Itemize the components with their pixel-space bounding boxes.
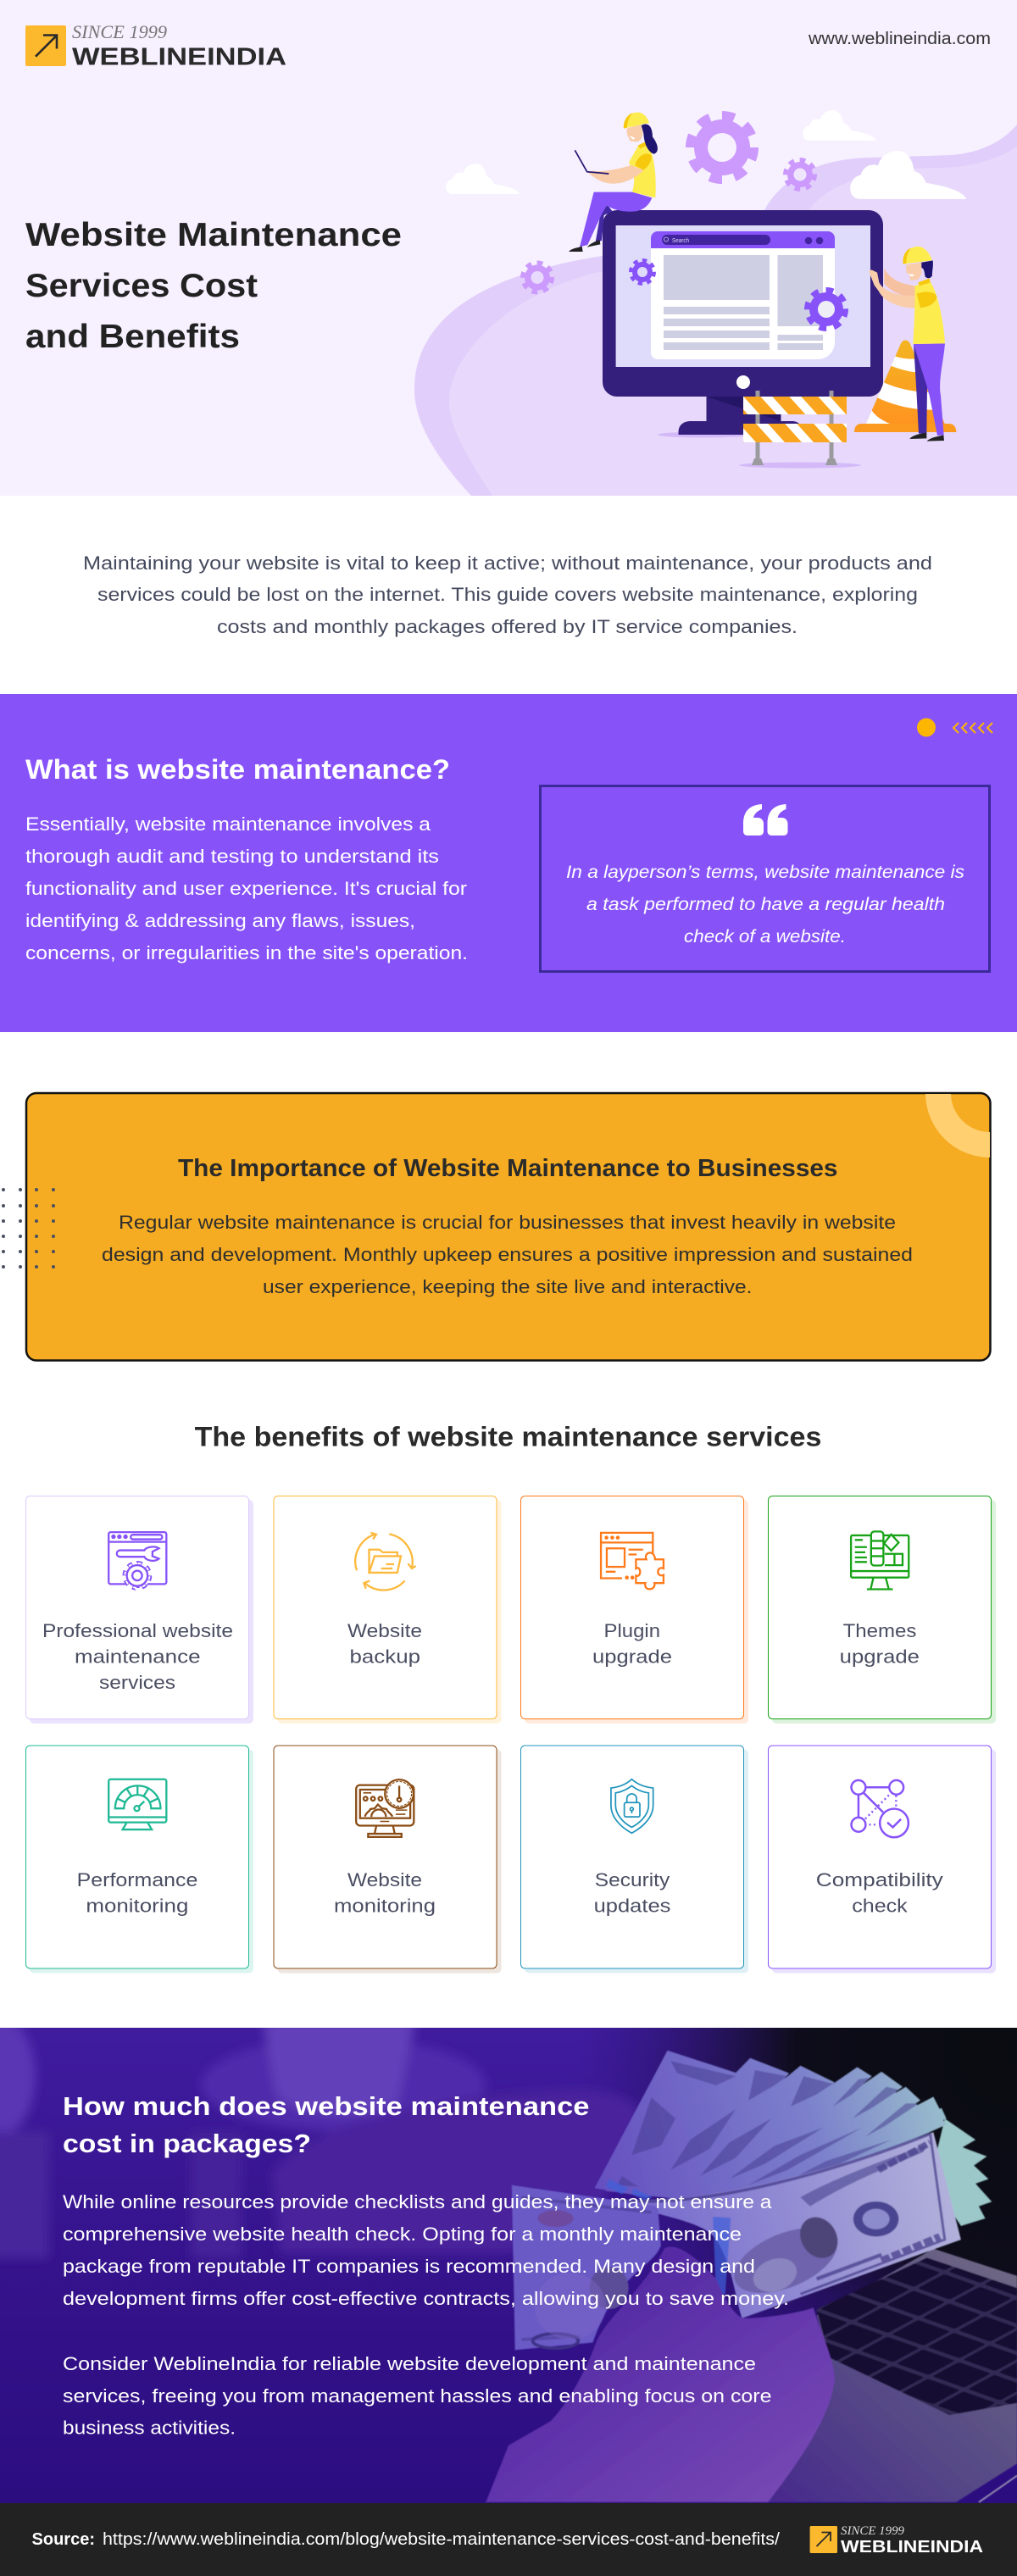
body text: concerns, or irregularities in the site's operation. (25, 942, 468, 963)
title: Services Cost (25, 268, 258, 304)
body text: second paragraph (63, 2353, 771, 2439)
title: Website Maintenance (25, 217, 402, 253)
panel: cost in packages (0, 2017, 1017, 2503)
label (347, 1620, 422, 1668)
icon: clouds (446, 110, 966, 199)
heading: How much does website maintenance (63, 2091, 590, 2121)
label (77, 1869, 197, 1917)
heading: What is website maintenance? (25, 754, 450, 785)
label (592, 1620, 672, 1668)
body text: Regular website maintenance is crucial for businesses that invest heavily in website (119, 1212, 896, 1233)
label (594, 1869, 670, 1917)
title: and Benefits (25, 319, 240, 355)
body text: functionality and user experience. It's crucial for (25, 878, 467, 899)
website url: www.weblineindia.com (808, 30, 991, 48)
label: upgrade (840, 1646, 920, 1668)
label: monitoring (86, 1895, 188, 1917)
icon: small gear left (523, 263, 552, 291)
decoration: dot and chevrons (917, 719, 992, 737)
label: monitoring (334, 1895, 436, 1917)
logo: WEBLINEINDIA (72, 44, 286, 71)
label (816, 1869, 943, 1917)
body text: second paragraph: services, freeing you from management hassles and enabling focus on core (63, 2385, 771, 2407)
quote text: In a layperson’s terms, website maintenance is (566, 863, 965, 882)
body text: first paragraph (63, 2191, 789, 2309)
panel: importance of website maintenance (2, 1091, 992, 1362)
body text (102, 1212, 913, 1297)
label (334, 1869, 436, 1917)
body text: Essentially, website maintenance involves a (25, 813, 431, 835)
label: Website (347, 1620, 422, 1641)
heading (63, 2091, 590, 2158)
icon: monitor with colour swatches (851, 1531, 909, 1589)
label (42, 1620, 233, 1693)
footer logo (810, 2524, 983, 2557)
body text: first paragraph: development firms offer cost-effective contracts, allowing you to save money. (63, 2288, 789, 2309)
footer logo: WEBLINEINDIA (841, 2538, 983, 2557)
card: website backup (274, 1496, 502, 1724)
intro paragraph: services could be lost on the internet. This guide covers website maintenance, exploring (97, 584, 918, 605)
icon: wrench and gear window (108, 1532, 166, 1589)
label: services (99, 1672, 175, 1693)
footer (0, 2503, 1017, 2576)
source text: https://www.weblineindia.com/blog/website-maintenance-services-cost-and-benefits/ (103, 2530, 780, 2549)
label: check (852, 1895, 909, 1917)
hero background waves (414, 125, 1017, 496)
card: security updates (520, 1746, 748, 1973)
label: Performance (77, 1869, 197, 1890)
card: themes upgrade (768, 1496, 996, 1724)
intro paragraph (83, 552, 932, 637)
card: compatibility check (768, 1746, 996, 1973)
label: Compatibility (816, 1869, 943, 1890)
icon: road barrier (743, 391, 847, 465)
icon: large gear (691, 116, 753, 179)
icon: small gear right (786, 160, 814, 189)
body text (25, 813, 468, 963)
decoration: dot grid (2, 1188, 55, 1269)
label: maintenance (75, 1646, 200, 1668)
figure: woman sitting on monitor with laptop (569, 113, 658, 252)
body text: second paragraph: business activities. (63, 2417, 236, 2439)
intro paragraph: Maintaining your website is vital to keep it active; without maintenance, your products and (83, 552, 932, 574)
logo (25, 21, 286, 71)
label: Security (595, 1869, 670, 1890)
label: backup (349, 1646, 420, 1668)
quote text (566, 863, 965, 947)
body text: first paragraph: package from reputable IT companies is recommended. Many design and (63, 2256, 755, 2277)
source text: Source: (32, 2530, 95, 2549)
card: performance monitoring (25, 1746, 253, 1973)
icon: network nodes with check (852, 1780, 909, 1837)
icon: quotation mark (743, 804, 788, 836)
logo: SINCE 1999 (72, 21, 167, 42)
intro paragraph: costs and monthly packages offered by IT service companies. (217, 616, 797, 637)
quote box (541, 786, 990, 971)
body text: second paragraph: Consider WeblineIndia for reliable website development and maintenance (63, 2353, 756, 2374)
browser window (651, 231, 835, 359)
card: website monitoring (274, 1746, 502, 1973)
panel: hero header (0, 0, 1017, 496)
background photo: hand holding dollar bills over a laptop (0, 2017, 1017, 2503)
label: Themes (843, 1620, 916, 1641)
title (25, 217, 402, 355)
icon: puzzle window (601, 1533, 664, 1589)
label: updates (594, 1895, 670, 1917)
label: upgrade (592, 1646, 672, 1668)
card: professional website maintenance services (25, 1496, 253, 1724)
browser window: Search (672, 238, 689, 244)
icon: shield with lock (611, 1779, 653, 1833)
label: Plugin (603, 1620, 660, 1641)
heading: benefits: The benefits of website maintenance services (195, 1422, 821, 1452)
icon: folder with sync arrows (355, 1533, 416, 1591)
heading: cost in packages? (63, 2129, 311, 2158)
figure: man holding monitor (869, 247, 945, 441)
icon: traffic cone (854, 339, 956, 432)
body text: identifying & addressing any flaws, issues, (25, 910, 415, 931)
icon: gauge monitor (108, 1779, 166, 1829)
quote text: check of a website. (684, 927, 846, 947)
heading: The Importance of Website Maintenance to Businesses (178, 1155, 837, 1182)
card: plugin upgrade (520, 1496, 748, 1724)
panel: what is website maintenance (0, 694, 1017, 1032)
label: Professional website (42, 1620, 233, 1641)
label: Website (347, 1869, 422, 1890)
money and hand detail (486, 2051, 1017, 2502)
footer logo: SINCE 1999 (841, 2524, 904, 2538)
body text: user experience, keeping the site live and interactive. (263, 1276, 753, 1297)
icon: gear on screen right (808, 291, 845, 328)
body text: first paragraph: While online resources provide checklists and guides, they may not ensure a (63, 2191, 772, 2212)
icon: gear on screen left (631, 261, 654, 283)
decoration: corner ring (925, 1094, 990, 1158)
body text: first paragraph: comprehensive website health check. Opting for a monthly maintenance (63, 2223, 742, 2245)
body text: thorough audit and testing to understand its (25, 846, 439, 867)
label (840, 1620, 920, 1668)
icon: monitor with dial (356, 1779, 414, 1837)
body text: design and development. Monthly upkeep ensures a positive impression and sustained (102, 1244, 913, 1265)
monitor (603, 210, 883, 468)
quote text: a task performed to have a regular health (586, 895, 945, 914)
